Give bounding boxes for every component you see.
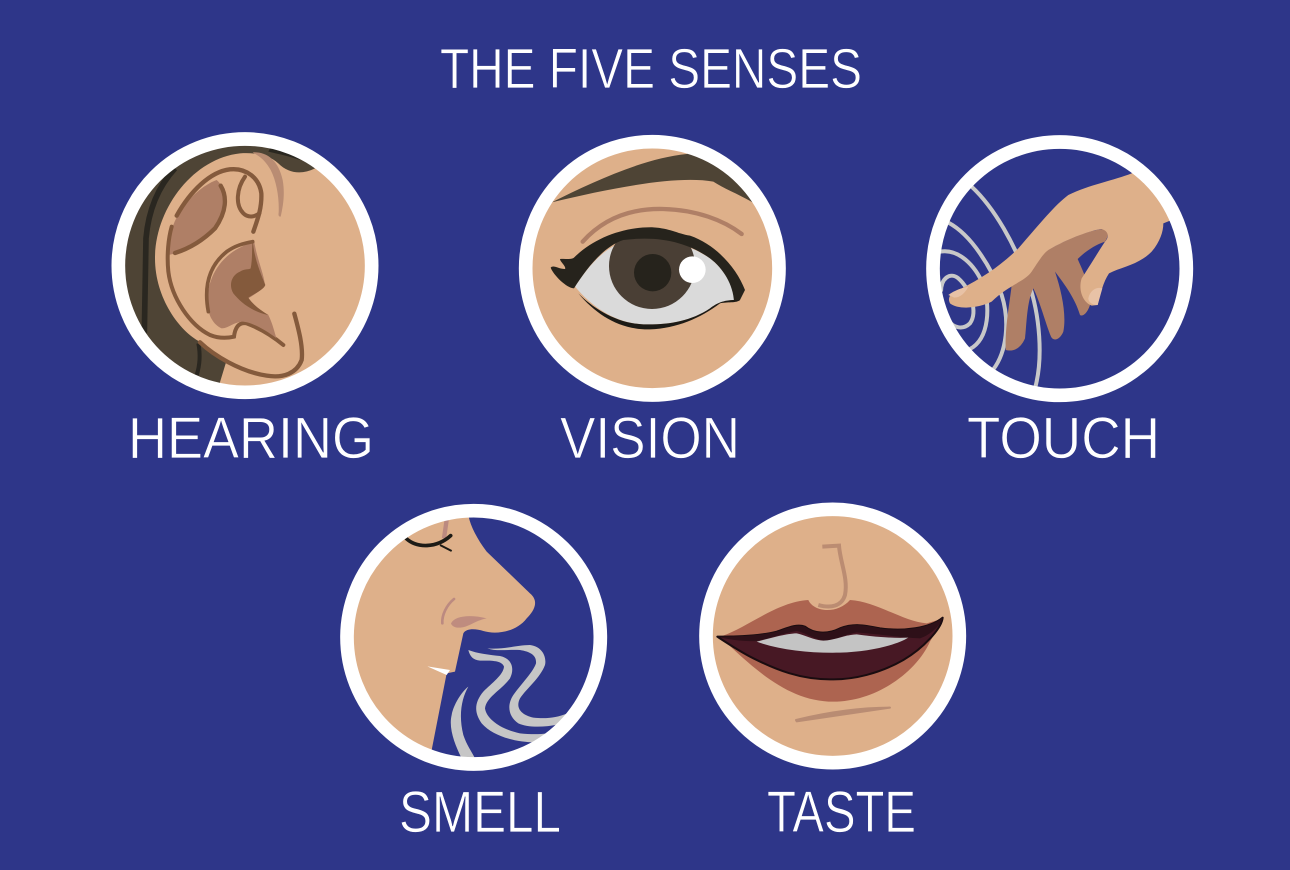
title: THE FIVE SENSES: [440, 37, 862, 101]
icon: nose (smell): [330, 495, 600, 764]
label: touch: TOUCH: [967, 406, 1160, 471]
icon: eye (vision): [518, 134, 786, 402]
label: smell: SMELL: [399, 780, 561, 845]
icon: ear (hearing): [112, 132, 378, 400]
label: vision: VISION: [560, 406, 740, 471]
label: hearing: HEARING: [128, 406, 374, 471]
icon: mouth (taste): [699, 502, 966, 770]
label: taste: TASTE: [767, 780, 916, 845]
icon: hand (touch): [933, 142, 1198, 395]
